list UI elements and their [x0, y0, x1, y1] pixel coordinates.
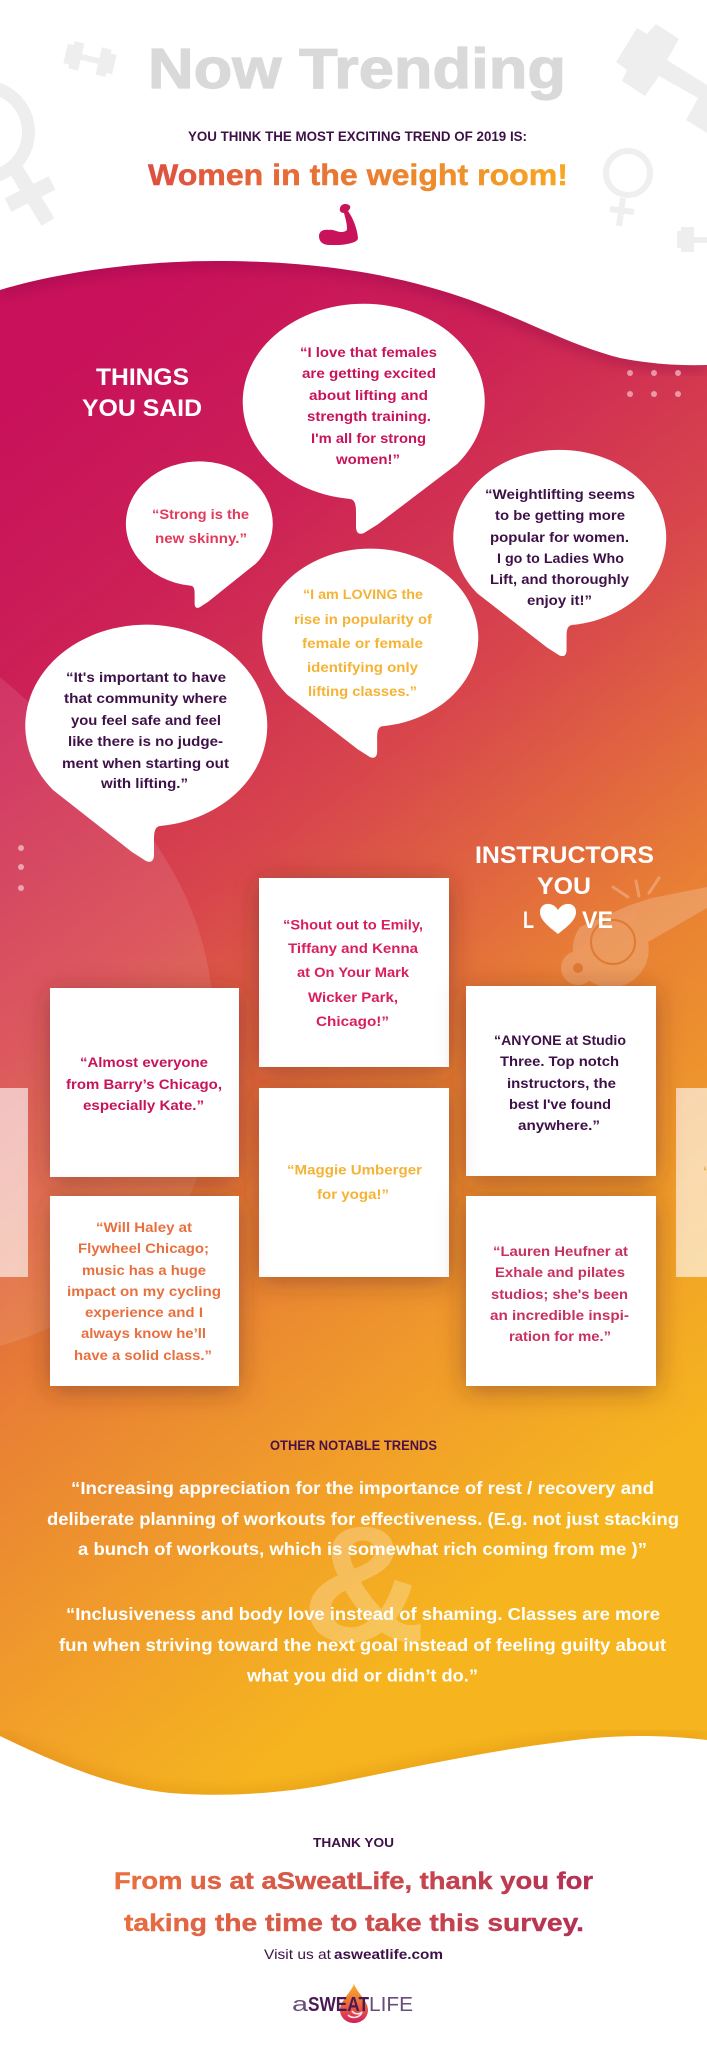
speech bubble: Weightlifting seems: to be getting more: [495, 507, 625, 523]
icon: small dumbbell right: [677, 227, 707, 252]
card: Lauren Heufner: ration for me.”: [509, 1328, 611, 1344]
speech bubble: It's important: that community where: [64, 690, 227, 706]
website link: asweatlife.com: [334, 1946, 443, 1962]
heading: things you said: [82, 364, 202, 422]
ampersand watermark: &: [302, 1492, 426, 1676]
card: Shout out: Wicker Park,: [308, 989, 398, 1005]
card: Will Haley: experience and I: [85, 1304, 203, 1320]
quote: rest and recovery: deliberate planning of workouts for effectiveness. (E.g. not just stacking: [47, 1509, 679, 1529]
heading: women in the weight room: Women in the weight room!: [148, 159, 568, 192]
quote: rest and recovery: “Increasing appreciation for the importance of rest / recovery and: [71, 1478, 654, 1498]
heading: other notable trends: OTHER NOTABLE TRENDS: [270, 1438, 437, 1453]
card: ANYONE at Studio Three: Three. Top notch: [500, 1053, 619, 1069]
card: Will Haley: impact on my cycling: [67, 1283, 221, 1299]
speech bubble: Strong is the new skinny: new skinny.”: [155, 530, 247, 546]
icon: flexed arm: [319, 204, 358, 245]
card: Shout out: Chicago!”: [316, 1013, 389, 1029]
speech bubble: Strong is the new skinny: “Strong is the: [152, 506, 249, 522]
card: ANYONE at Studio Three: instructors, the: [507, 1075, 616, 1091]
card: Will Haley: “Will Haley at: [96, 1219, 192, 1235]
card: Almost everyone: “Almost everyone: [80, 1054, 208, 1070]
heading: instructors you love: [475, 842, 654, 934]
closing message: taking the time to take this survey.: [124, 1910, 584, 1937]
speech bubble: Strong is the new skinny: [126, 461, 273, 608]
card: Maggie Umberger: for yoga!”: [317, 1186, 389, 1202]
card: Will Haley: [50, 1196, 239, 1386]
side panel right: [676, 1088, 707, 1277]
card: Lauren Heufner: “Lauren Heufner at: [493, 1243, 628, 1259]
icon: venus symbol left: [0, 86, 52, 222]
card: Shout out: [259, 878, 449, 1067]
card: Will Haley: have a solid class.”: [74, 1347, 212, 1363]
quote: inclusiveness: “Inclusiveness and body love instead of shaming. Classes are more: [66, 1604, 660, 1624]
card: ANYONE at Studio Three: best I've found: [509, 1096, 611, 1112]
card: ANYONE at Studio Three: anywhere.”: [518, 1117, 600, 1133]
heading: things you said: YOU SAID: [82, 395, 202, 422]
dots top right: [627, 352, 681, 397]
logo: [292, 1984, 413, 2023]
speech bubble: I love that females: about lifting and: [309, 387, 428, 403]
speech bubble: Weightlifting seems: popular for women.: [490, 529, 629, 545]
card: Shout out: at On Your Mark: [297, 964, 409, 980]
speech bubble: I love that females: “I love that females: [300, 344, 437, 360]
heading: things you said: THINGS: [96, 364, 189, 391]
speech bubble: I love that females: [243, 304, 485, 534]
speech bubble: I am LOVING: rise in popularity of: [294, 611, 432, 627]
quote: rest and recovery: [47, 1478, 679, 1559]
speech bubble: Weightlifting seems: enjoy it!”: [527, 592, 592, 608]
speech bubble: Weightlifting seems: “Weightlifting seems: [485, 486, 635, 502]
card: ANYONE at Studio Three: [466, 986, 656, 1176]
speech bubble: It's important: “It's important to have: [66, 669, 226, 685]
card: Shout out: “Shout out to Emily,: [283, 916, 423, 932]
heading: instructors you love: INSTRUCTORS: [475, 842, 654, 869]
speech bubble: Weightlifting seems: [453, 450, 666, 656]
card: Lauren Heufner: studios; she's been: [491, 1286, 628, 1302]
logo: LIFE: [369, 1994, 413, 2016]
gradient wave panel: [0, 261, 707, 1795]
card: Shout out: Tiffany and Kenna: [288, 940, 418, 956]
closing message: [114, 1868, 593, 1937]
speech bubble: It's important: with lifting.”: [100, 775, 188, 791]
icon: whistle: [561, 878, 707, 987]
icon: small dumbbell top left: [62, 40, 118, 78]
heading: instructors you love: L: [523, 907, 534, 934]
quote: inclusiveness: what you did or didn’t do.”: [246, 1666, 478, 1686]
speech bubble: I love that females: strength training.: [307, 408, 431, 424]
heading: instructors you love: VE: [582, 907, 613, 934]
quote: rest and recovery: a bunch of workouts, which is somewhat rich coming from me )”: [78, 1539, 647, 1559]
speech bubble: I am LOVING: female or female: [302, 635, 423, 651]
icon: venus symbol right: [606, 151, 650, 226]
side panel left: [0, 1088, 28, 1277]
card: Lauren Heufner: [466, 1196, 656, 1386]
speech bubble: It's important: ment when starting out: [62, 755, 229, 771]
title: Now Trending: [148, 37, 566, 101]
quote: inclusiveness: [59, 1604, 666, 1686]
card: Almost everyone: [50, 988, 239, 1177]
speech bubble: I am LOVING: [262, 549, 478, 758]
website link: Visit us at: [264, 1946, 331, 1962]
card: Lauren Heufner: Exhale and pilates: [495, 1264, 625, 1280]
card: Maggie Umberger: [259, 1088, 449, 1277]
heading: instructors you love: YOU: [537, 873, 591, 900]
speech bubble: I am LOVING: lifting classes.”: [308, 683, 417, 699]
speech bubble: I love that females: women!”: [335, 451, 400, 467]
logo: a: [292, 1994, 309, 2016]
quote: inclusiveness: fun when striving toward the next goal instead of feeling guilty about: [59, 1635, 666, 1655]
card: Almost everyone: especially Kate.”: [83, 1097, 204, 1113]
speech bubble: I love that females: I'm all for strong: [311, 430, 426, 446]
closing message: From us at aSweatLife, thank you for: [114, 1868, 593, 1895]
dots left: [18, 845, 24, 891]
icon: large dumbbell top right: [616, 24, 707, 133]
speech bubble: It's important: [25, 625, 267, 862]
subtitle: YOU THINK THE MOST EXCITING TREND OF 2019 IS:: [188, 128, 527, 144]
speech bubble: It's important: like there is no judge-: [68, 733, 223, 749]
speech bubble: Weightlifting seems: Lift, and thoroughly: [490, 571, 629, 587]
speech bubble: I am LOVING: “I am LOVING the: [303, 586, 423, 602]
speech bubble: I love that females: are getting excited: [302, 365, 436, 381]
speech bubble: I am LOVING: identifying only: [307, 659, 418, 675]
card: Will Haley: music has a huge: [82, 1262, 206, 1278]
speech bubble: Weightlifting seems: I go to Ladies Who: [497, 550, 624, 566]
card: Lauren Heufner: an incredible inspi-: [490, 1307, 629, 1323]
logo: SWEAT: [308, 1994, 369, 2016]
label: thank you: THANK YOU: [313, 1835, 394, 1850]
website link: [264, 1946, 443, 1962]
speech bubble: It's important: you feel safe and feel: [71, 712, 221, 728]
card: Will Haley: always know he’ll: [81, 1325, 206, 1341]
card: Will Haley: Flywheel Chicago;: [78, 1240, 209, 1256]
card: Almost everyone: from Barry’s Chicago,: [66, 1076, 222, 1092]
card: ANYONE at Studio Three: “ANYONE at Studio: [494, 1032, 626, 1048]
card: Maggie Umberger: “Maggie Umberger: [287, 1162, 423, 1178]
